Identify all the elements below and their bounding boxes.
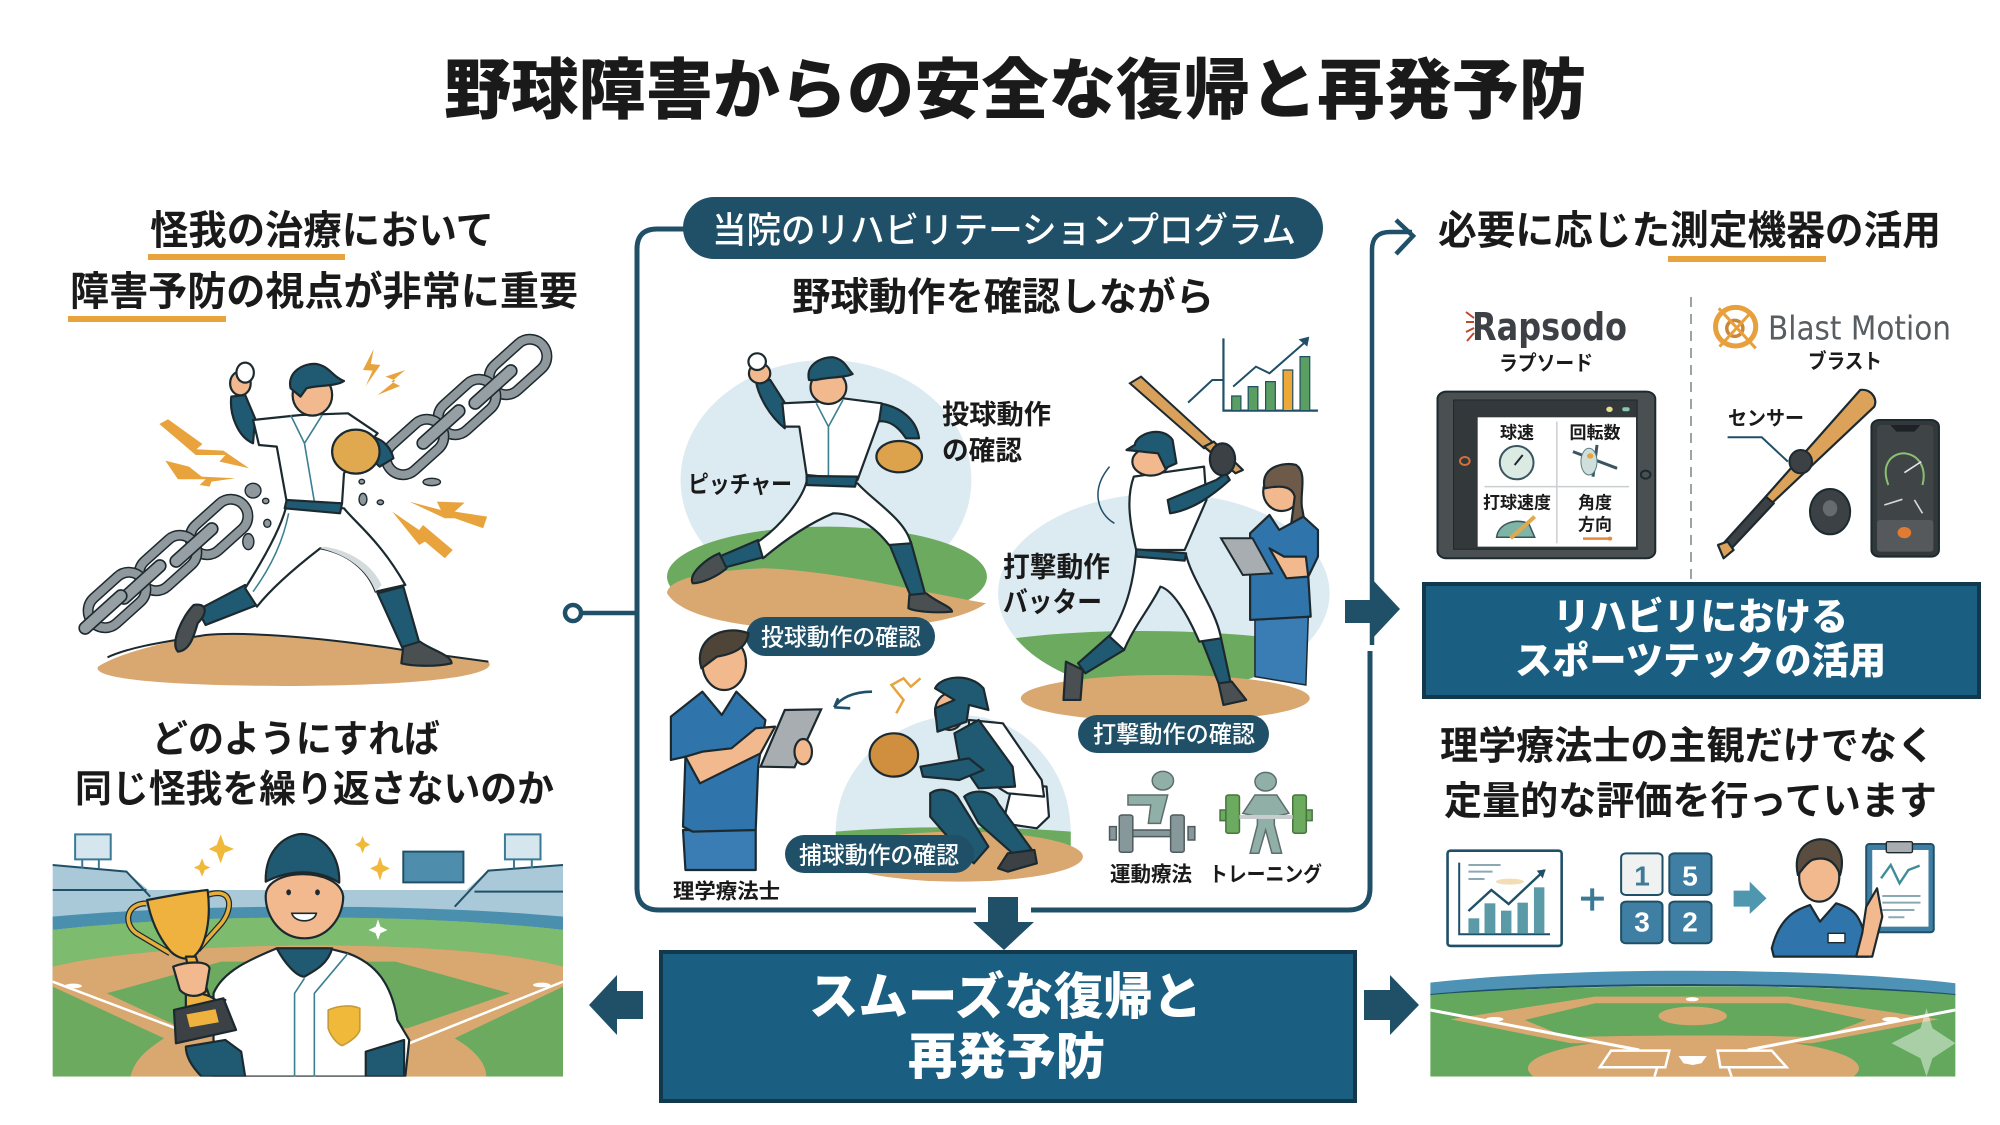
- device: Rapsodo tablet: ラプソード: [1499, 352, 1593, 376]
- connector: circle to program frame: [565, 605, 636, 621]
- subheading: checking baseball motion: 野球動作を確認しながら: [792, 276, 1214, 320]
- heading: how not to repeat injury: [75, 719, 554, 811]
- callout: smooth return and prevention: 再発予防: [908, 1029, 1105, 1085]
- device: Blast Motion bat sensor: センサー: [1728, 408, 1804, 430]
- heading: measurement devices: 必要に応じた測定機器の活用: [1438, 209, 1941, 253]
- illustration: baseball field: [1430, 970, 1956, 1077]
- arrow: program to sports tech: [1345, 578, 1400, 640]
- arrow: left to player: [589, 975, 643, 1035]
- device: Rapsodo tablet: 球速: [1500, 424, 1534, 442]
- scene: pitcher motion check: ピッチャー: [688, 472, 792, 498]
- scene: batter motion check: バッター: [1003, 586, 1102, 618]
- heading: how not to repeat injury: 同じ怪我を繰り返さないのか: [75, 769, 554, 811]
- device: Blast Motion bat sensor: ブラスト: [1808, 350, 1882, 374]
- pill: batting check: [1078, 715, 1269, 753]
- device: Blast Motion bat sensor: [1716, 307, 1951, 558]
- label: training: トレーニング: [1209, 862, 1322, 886]
- heading: how not to repeat injury: どのようにすれば: [152, 719, 440, 761]
- scene: batter motion check: 打撃動作: [1003, 552, 1110, 582]
- callout: smooth return and prevention: スムーズな復帰と: [809, 969, 1202, 1025]
- pill: catching check: [785, 835, 974, 873]
- logo: Blast Motion mark: [1716, 307, 1756, 348]
- pill: pitching check: [746, 617, 935, 656]
- text: quantitative evaluation: [1440, 726, 1937, 824]
- scene: pitcher motion check: [667, 353, 1051, 656]
- scene: pitcher motion check: 投球動作: [942, 400, 1051, 430]
- device: Rapsodo tablet: 方向: [1578, 514, 1612, 534]
- device: Rapsodo tablet: 回転数: [1570, 424, 1620, 442]
- panel: rehabilitation program frame: [637, 229, 1370, 910]
- arrow: right to field: [1364, 975, 1419, 1035]
- illustration: pitcher breaking chains: [77, 332, 554, 686]
- chain: upper right: [379, 332, 554, 482]
- illustration: player with trophy in stadium: [53, 834, 563, 1077]
- callout: sports tech box: リハビリにおける: [1553, 596, 1848, 639]
- pill: pitching check: 投球動作の確認: [761, 624, 921, 652]
- device: Rapsodo tablet: 打球速度: [1483, 492, 1551, 512]
- arrow: down to result: [973, 897, 1034, 950]
- heading: injury prevention viewpoint: 怪我の治療において: [150, 209, 494, 253]
- scene: batter motion check: [993, 337, 1335, 753]
- header pill: program name: [683, 197, 1323, 259]
- label: exercise therapy: 運動療法: [1110, 864, 1192, 886]
- icons: data plus numbers equals evaluation: 2: [1682, 906, 1698, 938]
- chain: lower left: [77, 492, 255, 637]
- divider: dashed: [1690, 297, 1692, 582]
- device: Rapsodo tablet: 角度: [1578, 492, 1612, 512]
- device: Rapsodo tablet: Rapsodo: [1472, 305, 1627, 349]
- icons: data plus numbers equals evaluation: 1: [1634, 860, 1650, 892]
- callout: sports tech box: スポーツテックの活用: [1515, 641, 1886, 683]
- icons: data plus numbers equals evaluation: 3: [1634, 906, 1650, 938]
- arrow: frame to measurement heading: [1372, 220, 1413, 645]
- pill: batting check: 打撃動作の確認: [1093, 722, 1255, 748]
- callout: sports tech box: [1424, 584, 1979, 697]
- header pill: program name: 当院のリハビリテーションプログラム: [712, 210, 1296, 250]
- icons: data plus numbers equals evaluation: 5: [1682, 860, 1698, 892]
- scene: catcher with physical therapist: [671, 630, 1322, 904]
- pill: catching check: 捕球動作の確認: [799, 842, 959, 870]
- icons: data plus numbers equals evaluation: [1448, 839, 1934, 957]
- title: 野球障害からの安全な復帰と再発予防: [444, 53, 1586, 127]
- scene: pitcher motion check: の確認: [942, 436, 1022, 466]
- heading: injury prevention viewpoint: 障害予防の視点が非常に重要: [70, 270, 578, 314]
- callout: smooth return and prevention: [661, 952, 1355, 1101]
- scene: catcher with physical therapist: 理学療法士: [673, 880, 780, 904]
- device: Blast Motion bat sensor: Blast Motion: [1768, 308, 1951, 348]
- text: quantitative evaluation: 定量的な評価を行っています: [1444, 780, 1937, 824]
- device: Rapsodo tablet: [1438, 305, 1655, 558]
- text: quantitative evaluation: 理学療法士の主観だけでなく: [1440, 726, 1935, 768]
- heading: injury prevention viewpoint: [68, 209, 578, 322]
